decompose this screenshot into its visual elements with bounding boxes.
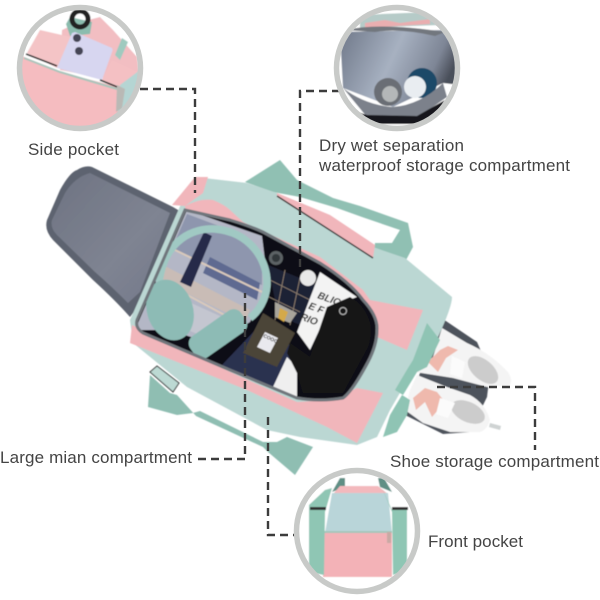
compartment rim xyxy=(137,210,377,400)
label: dry wet separation: waterproof storage compartment xyxy=(318,156,570,175)
white book: BLIC xyxy=(316,290,342,309)
dashed connector: shoe compartment xyxy=(437,387,535,450)
white book: RIO xyxy=(299,312,319,328)
icon: bottom shoe xyxy=(405,375,501,432)
lower handle xyxy=(148,366,313,475)
icon: top shoe xyxy=(415,328,511,389)
bag illustration xyxy=(46,160,511,475)
panel: front pocket circle xyxy=(295,468,419,594)
bottles xyxy=(374,68,437,106)
panel: side pocket circle xyxy=(15,5,143,131)
main compartment interior xyxy=(137,211,376,400)
green straps xyxy=(383,323,440,437)
panel: wet compartment circle xyxy=(336,8,460,130)
dashed connector: front pocket xyxy=(268,417,295,535)
label: large main compartment: Large mian compartment xyxy=(0,448,192,467)
icon: phone xyxy=(57,32,112,80)
headphones xyxy=(139,229,267,362)
bag body xyxy=(130,177,452,445)
dashed connector: side pocket xyxy=(140,89,195,193)
upper handle xyxy=(245,160,413,275)
bottles xyxy=(269,251,316,286)
white book xyxy=(273,272,357,398)
white book: E F xyxy=(307,301,326,317)
dashed connector: main compartment xyxy=(198,293,245,459)
blanket xyxy=(138,211,314,386)
perfume bottle xyxy=(243,302,297,367)
bag flap xyxy=(46,166,183,317)
black gloves xyxy=(287,297,371,393)
perfume bottle: COOC xyxy=(262,333,279,345)
label: shoe storage compartment: Shoe storage compartment xyxy=(390,452,599,471)
shoes compartment backing xyxy=(405,317,490,434)
pink panels xyxy=(130,177,423,443)
label: dry wet separation: Dry wet separation xyxy=(319,136,464,155)
zipper line xyxy=(277,196,373,258)
dashed connector: wet compartment xyxy=(300,91,340,268)
label: side pocket: Side pocket xyxy=(28,140,119,159)
label: dry wet separation xyxy=(318,136,570,175)
label: front pocket: Front pocket xyxy=(428,532,523,551)
